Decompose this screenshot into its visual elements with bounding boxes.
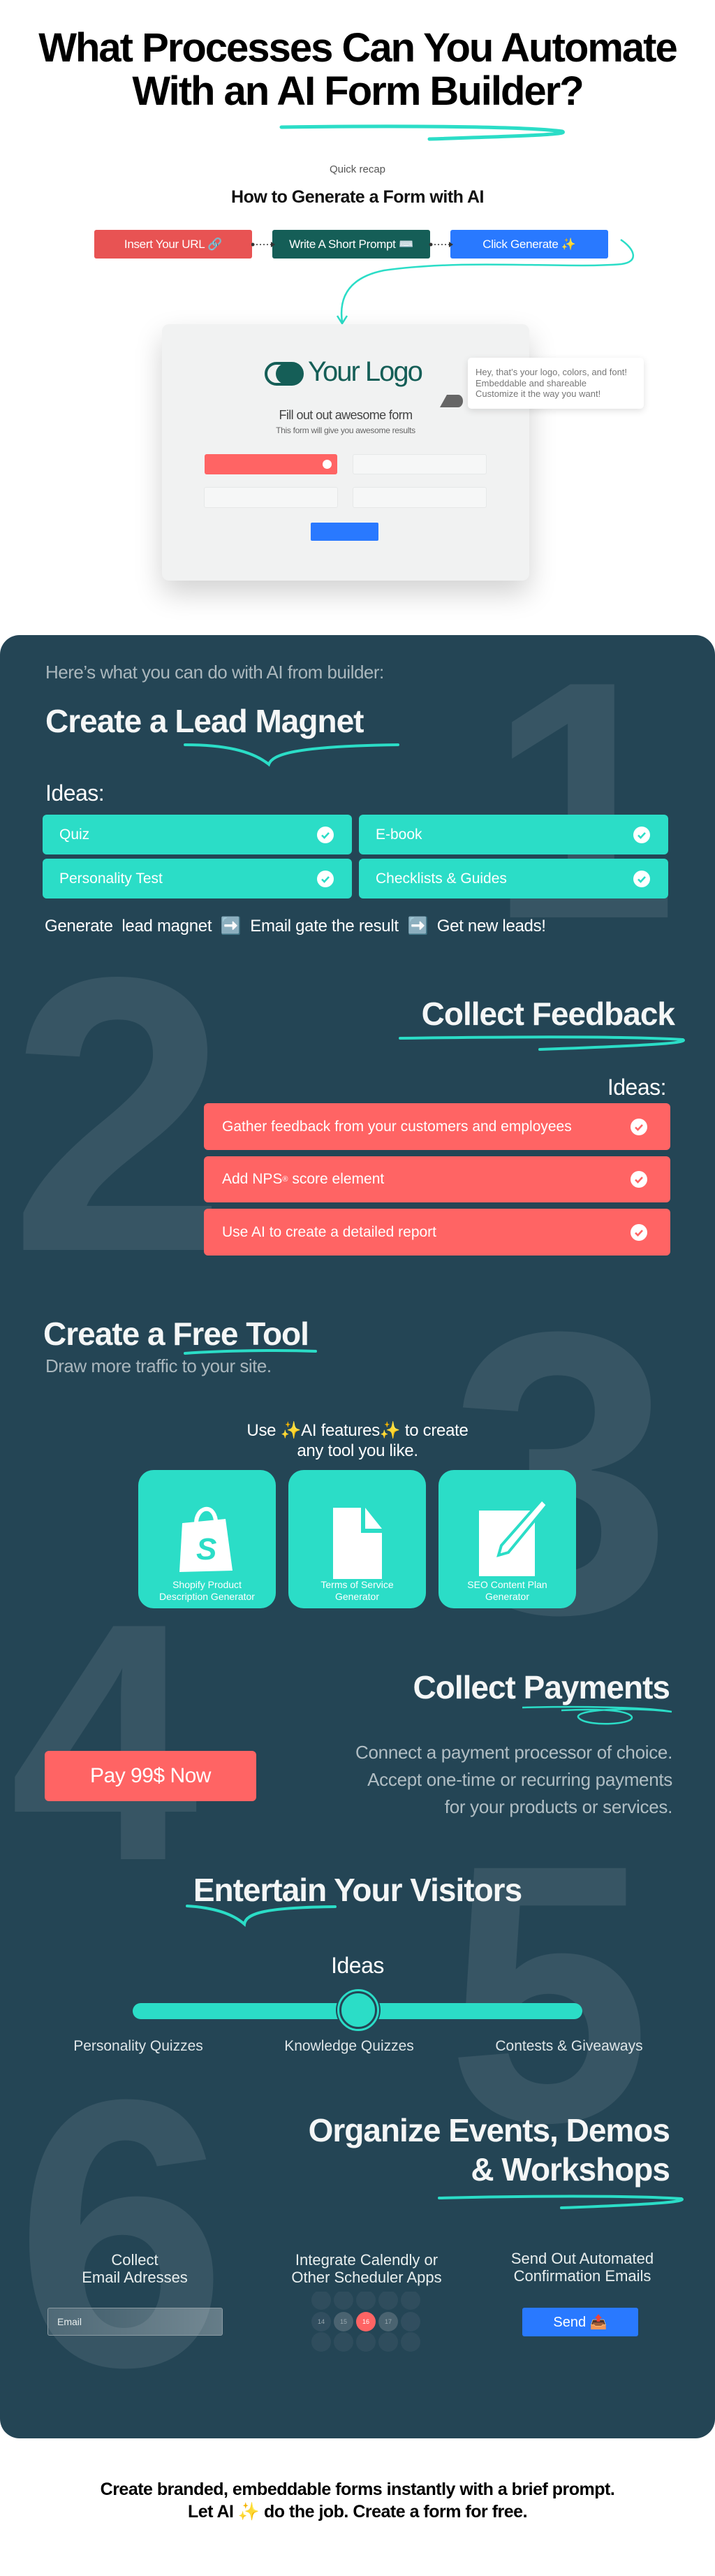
heading: entertain visitors: Entertain Your Visitors (193, 1872, 522, 1908)
step 2 button (272, 230, 430, 259)
panel: dark main (0, 635, 715, 2438)
AI features text (246, 1421, 469, 1460)
idea: ebook (359, 815, 668, 854)
tile: SEO (438, 1470, 576, 1608)
title (38, 25, 677, 114)
steps row (94, 230, 608, 259)
form preview card (162, 324, 529, 581)
watermark 4: 4 (10, 1552, 198, 1931)
column: calendly: Other Scheduler Apps (291, 2269, 442, 2286)
column: calendly (291, 2251, 442, 2286)
watermark 2: 2 (10, 896, 227, 1333)
step 1 button (94, 230, 252, 259)
calendar dots: 17 (385, 2318, 392, 2325)
step 2 button: Write A Short Prompt ⌨️ (289, 238, 413, 250)
idea: NPS: Add NPS score element (222, 1171, 384, 1187)
tile: SEO: SEO Content Plan (467, 1579, 547, 1590)
column: confirmation: Send Out Automated (511, 2250, 654, 2267)
slider labels: Knowledge Quizzes (284, 2038, 414, 2054)
email input: Email (57, 2316, 82, 2327)
tile: terms: Generator (335, 1591, 379, 1602)
arrow: curve to form (337, 239, 634, 324)
ideas label 1: Ideas: (45, 780, 104, 806)
payments description: Accept one-time or recurring payments (367, 1769, 672, 1790)
underline lead magnet (184, 743, 399, 767)
underline payments loop (522, 1706, 672, 1724)
logo text: Your Logo (308, 356, 422, 387)
heading: collect payments: Collect Payments (413, 1669, 670, 1705)
logo icon (265, 362, 304, 386)
send button (522, 2308, 638, 2336)
intro text: Here’s what you can do with AI from builder: (45, 662, 384, 683)
calendar dots (311, 2292, 420, 2352)
icon: shopping bag (179, 1506, 233, 1572)
tile: terms: Terms of Service (320, 1579, 394, 1590)
feedback ideas list (204, 1103, 670, 1256)
idea: checklists: Checklists & Guides (376, 871, 507, 886)
tile: SEO: Generator (485, 1591, 529, 1602)
heading: free tool: Create a Free Tool (43, 1316, 309, 1352)
tile: terms (288, 1470, 426, 1608)
slider (133, 1989, 582, 2031)
heading: organize events: Organize Events, Demos (309, 2112, 670, 2148)
title: With an AI Form Builder? (132, 68, 583, 114)
payments description: Connect a payment processor of choice. (355, 1742, 672, 1763)
idea: NPS: ® (282, 1175, 288, 1184)
AI features text: Use ✨AI features✨ to create (246, 1421, 469, 1440)
slider labels: Personality Quizzes (73, 2038, 203, 2054)
column: email (82, 2251, 188, 2286)
slider labels (73, 2038, 643, 2054)
speech bubble icon (440, 395, 463, 407)
title: What Processes Can You Automate (38, 25, 677, 71)
step 1 button: Insert Your URL 🔗 (124, 238, 222, 250)
watermark 5: 5 (447, 1789, 651, 2199)
underline entertain (186, 1905, 337, 1927)
idea: gather feedback: Gather feedback from your customers and employees (222, 1118, 572, 1135)
logo (265, 356, 422, 387)
slider knob (336, 1988, 381, 2032)
calendar dots: 15 (340, 2318, 347, 2325)
calendar dots: 16 (362, 2318, 369, 2325)
tooltip callout (468, 358, 644, 409)
icon: document (333, 1508, 382, 1579)
payments description (355, 1742, 672, 1817)
tooltip callout: Embeddable and shareable (476, 377, 587, 388)
subtitle: quick recap: Quick recap (330, 163, 385, 175)
tile: shopify: Shopify Product (172, 1579, 242, 1590)
tooltip callout: Hey, that’s your logo, colors, and font! (476, 367, 627, 377)
underline events (438, 2195, 684, 2209)
submit button (311, 523, 378, 541)
pay button (45, 1751, 256, 1801)
calendar dots: 14 (318, 2318, 325, 2325)
footer text: Create branded, embeddable forms instantly with a brief prompt. (101, 2480, 614, 2499)
footer text (101, 2480, 614, 2522)
idea: AI report (204, 1209, 670, 1256)
tooltip callout: Customize it the way you want! (476, 388, 600, 399)
idea: AI report: Use AI to create a detailed report (222, 1224, 436, 1239)
idea: gather feedback (204, 1103, 670, 1150)
idea: checklists (359, 859, 668, 898)
email input (47, 2308, 223, 2336)
heading: collect feedback: Collect Feedback (422, 996, 675, 1032)
free tool subtitle: Draw more traffic to your site. (45, 1355, 272, 1376)
idea: ebook: E-book (376, 826, 422, 843)
title underline swoosh (279, 124, 565, 141)
idea: quiz: Quiz (59, 826, 89, 843)
underline free tool (184, 1349, 317, 1355)
step 3 button (450, 230, 608, 259)
column: calendly: Integrate Calendly or (295, 2251, 438, 2269)
tool tiles (138, 1470, 576, 1608)
footer text: Let AI ✨ do the job. Create a form for free. (188, 2502, 527, 2522)
idea: personality test: Personality Test (59, 871, 163, 886)
ideas grid: lead magnet (43, 815, 668, 898)
watermark 3: 3 (449, 1248, 672, 1697)
underline feedback (399, 1035, 685, 1051)
pay button: Pay 99$ Now (90, 1764, 211, 1787)
column: email: Email Adresses (82, 2269, 188, 2286)
heading: organize events: & Workshops (471, 2151, 670, 2188)
column: email: Collect (111, 2251, 159, 2269)
form subtitle: This form will give you awesome results (276, 425, 415, 435)
slider labels: Contests & Giveaways (495, 2038, 643, 2054)
watermark 6: 6 (15, 2021, 227, 2438)
column: confirmation: Confirmation Emails (514, 2267, 651, 2285)
column: confirmation (511, 2250, 654, 2285)
heading: lead magnet: Create a Lead Magnet (45, 703, 363, 739)
inputs (205, 454, 337, 474)
AI features text: any tool you like. (297, 1441, 418, 1460)
heading: organize events (309, 2112, 670, 2188)
form title: Fill out out awesome form (279, 408, 413, 422)
flow text: Generate lead magnet ➡️ Email gate the result ➡️ Get new leads! (45, 917, 546, 936)
icon: shopping bag: S (196, 1532, 216, 1566)
tile: shopify: Description Generator (159, 1591, 255, 1602)
ideas label 3: Ideas (331, 1953, 384, 1978)
idea: personality test (43, 859, 352, 898)
heading: how to generate: How to Generate a Form with AI (231, 187, 484, 207)
step 3 button: Click Generate ✨ (482, 238, 576, 250)
idea: NPS (204, 1156, 670, 1202)
tile: shopify (138, 1470, 276, 1608)
ideas label 2: Ideas: (607, 1075, 666, 1100)
icon: edit (479, 1501, 546, 1576)
payments description: for your products or services. (445, 1796, 672, 1817)
idea: quiz (43, 815, 352, 854)
send button: Send 📤 (553, 2315, 607, 2330)
dotted connectors (251, 242, 453, 247)
